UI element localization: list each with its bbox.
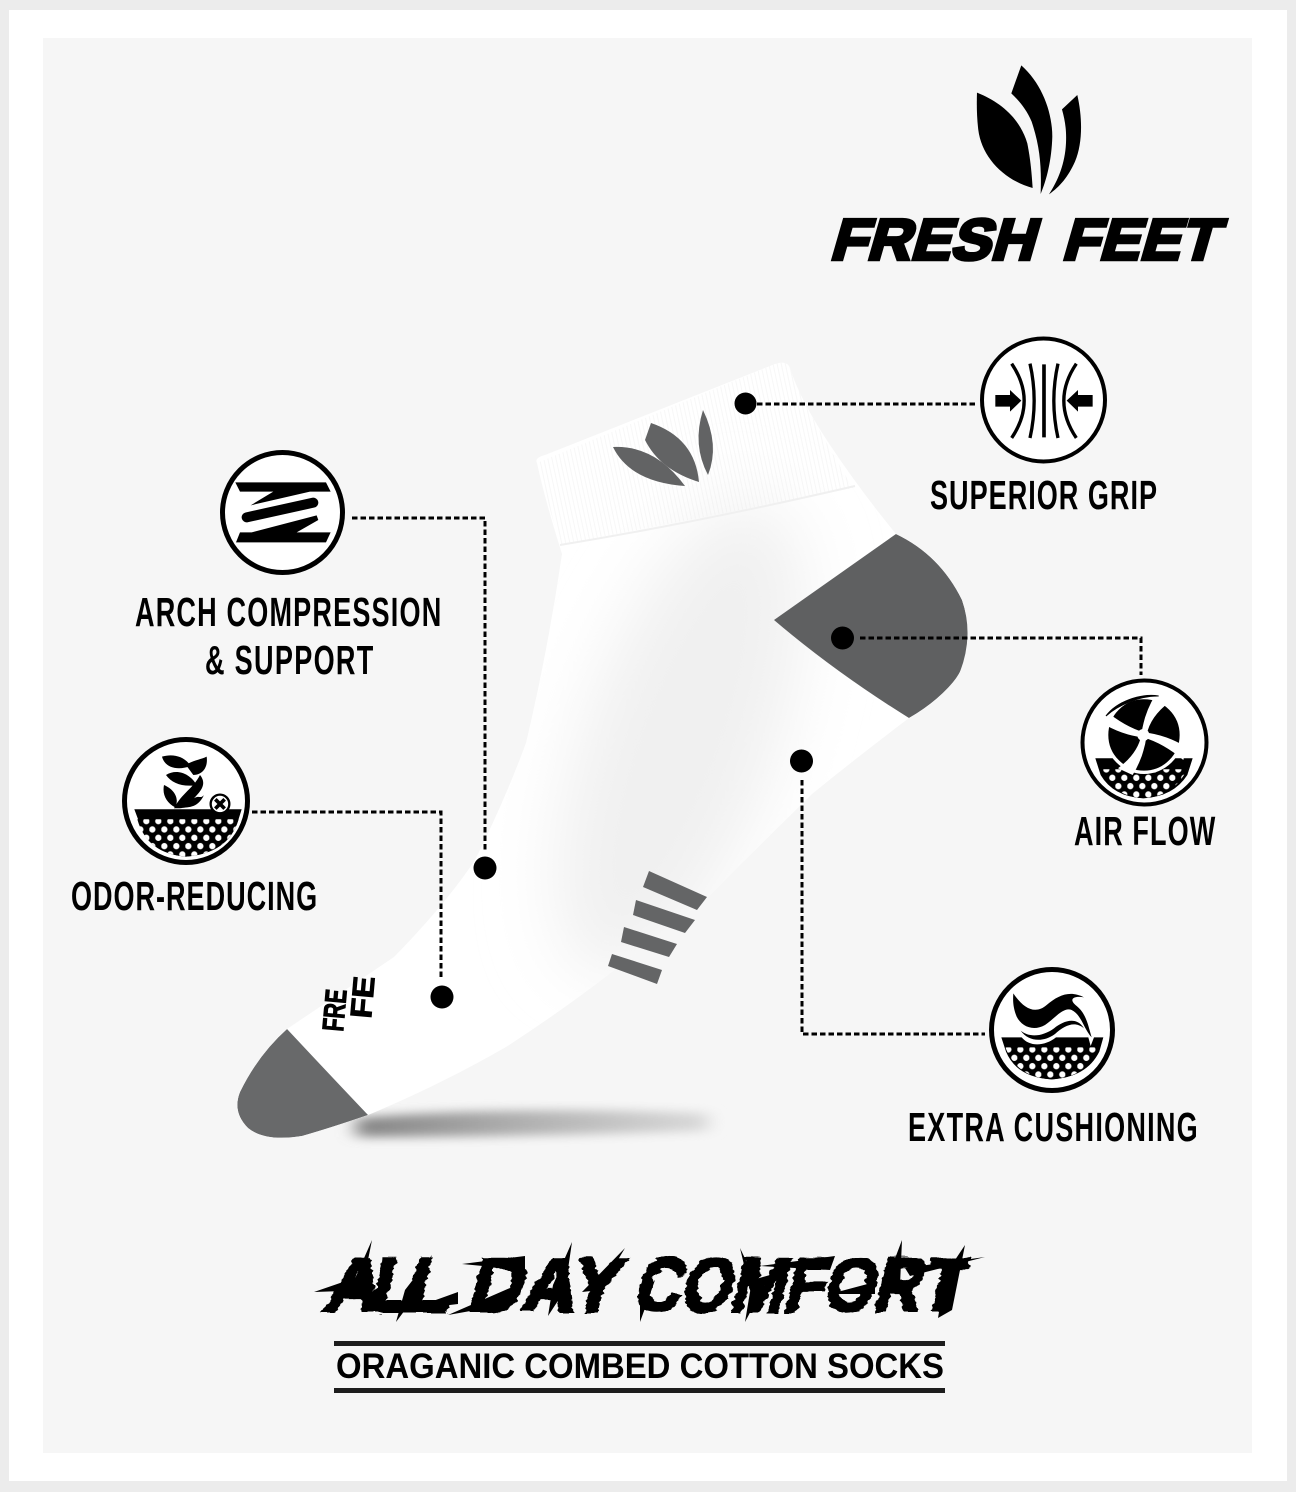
heading text: ALL bbox=[318, 1243, 465, 1328]
toe patch bbox=[237, 1029, 368, 1138]
heading text: DAY bbox=[462, 1243, 633, 1328]
heading text: COMFORT bbox=[628, 1243, 974, 1328]
icon: odor over fabric bbox=[124, 740, 248, 862]
feature: arch compression and support bbox=[135, 452, 441, 683]
sock illustration bbox=[237, 363, 968, 1138]
shadow under sock bbox=[356, 1110, 708, 1137]
label: ARCH COMPRESSION bbox=[135, 591, 441, 635]
connector: arch compression bbox=[352, 518, 485, 851]
label bbox=[135, 591, 441, 683]
label: SUPERIOR GRIP bbox=[930, 474, 1157, 518]
wordmark bbox=[825, 207, 1231, 272]
label: EXTRA CUSHIONING bbox=[908, 1106, 1198, 1150]
brand logo: Fresh Feet bbox=[825, 65, 1231, 272]
connector: extra cushioning bbox=[802, 780, 985, 1034]
connector: superior grip bbox=[757, 402, 975, 406]
wordmark: FEET bbox=[1057, 207, 1231, 272]
heading text bbox=[318, 1243, 974, 1328]
connector: odor reducing bbox=[252, 812, 441, 978]
connector: air flow bbox=[860, 638, 1141, 675]
label: ODOR-REDUCING bbox=[71, 875, 317, 919]
feature: extra cushioning bbox=[908, 970, 1198, 1150]
brush spikes bbox=[314, 1240, 985, 1322]
feature: air flow bbox=[1074, 680, 1215, 854]
heading: all day comfort bbox=[314, 1240, 985, 1328]
connector lines and dots bbox=[252, 404, 1141, 1034]
callout dots bbox=[430, 392, 854, 1008]
feature: superior grip bbox=[930, 338, 1157, 518]
icon: fan over fabric bbox=[1082, 680, 1206, 804]
feature: odor reducing bbox=[71, 740, 317, 919]
label: & SUPPORT bbox=[205, 639, 373, 683]
icon: cushion wave over fabric bbox=[992, 970, 1112, 1090]
subheading: organic combed cotton socks: ORAGANIC COMBED COTTON SOCKS bbox=[336, 1347, 944, 1386]
toe brand text: FE bbox=[345, 975, 382, 1020]
icon: compression spring bbox=[222, 452, 342, 572]
sock stripes bbox=[608, 871, 707, 984]
icon: three leaf logo bbox=[977, 65, 1081, 194]
wordmark: FRESH bbox=[825, 207, 1048, 272]
icon: compression lines bbox=[982, 338, 1105, 462]
toe brand text bbox=[317, 975, 382, 1033]
label: AIR FLOW bbox=[1074, 810, 1215, 854]
heel patch bbox=[774, 534, 968, 718]
sock leaf logo bbox=[613, 410, 713, 486]
sock body bbox=[237, 363, 968, 1138]
toe brand text: FRE bbox=[317, 988, 354, 1033]
